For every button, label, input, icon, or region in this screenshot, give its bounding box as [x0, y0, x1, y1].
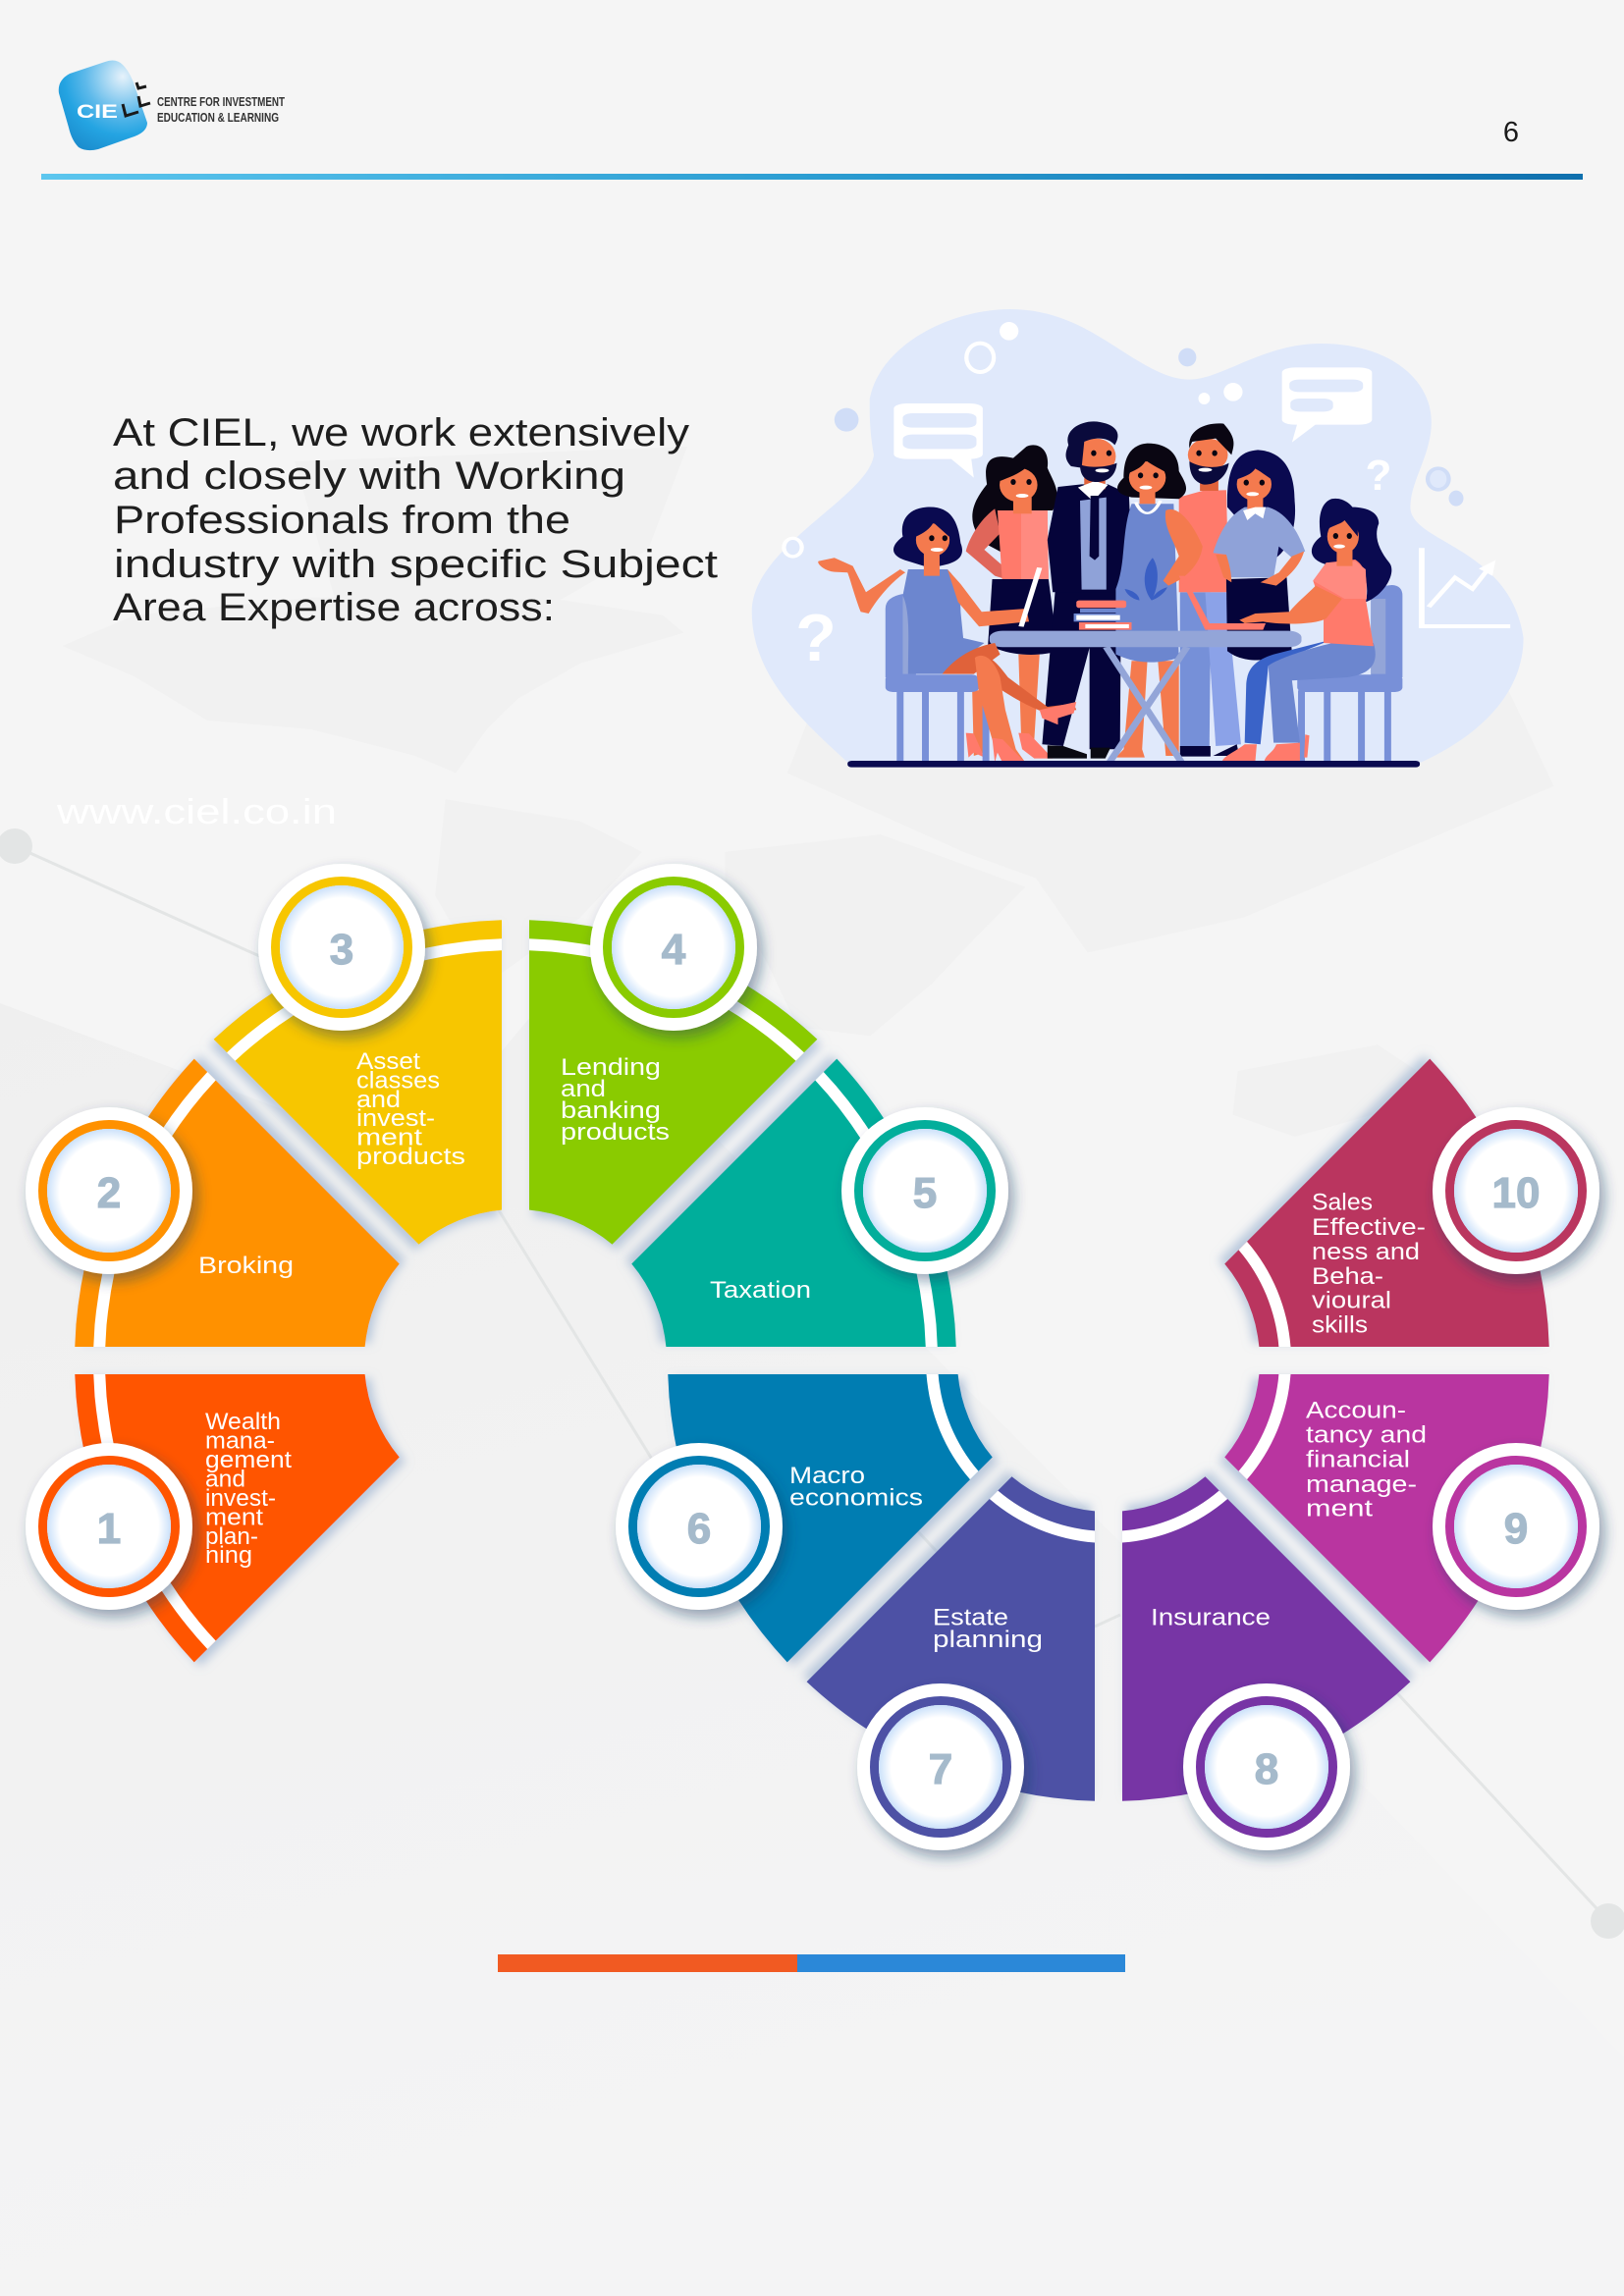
intro heading: and closely with Working: [113, 454, 625, 498]
books: [1074, 601, 1131, 630]
label: Insurance: [1151, 1604, 1271, 1631]
intro heading: At CIEL, we work extensively: [113, 411, 689, 454]
footer colour bar: [498, 1954, 1125, 1972]
label: [561, 1054, 670, 1146]
label: Effective-: [1312, 1214, 1426, 1241]
intro heading: Area Expertise across:: [113, 586, 555, 629]
badge 5: [841, 1107, 1008, 1274]
label: and: [356, 1087, 401, 1113]
label: Beha-: [1312, 1263, 1383, 1290]
table: [990, 631, 1302, 763]
segment 5: taxation: [631, 1059, 956, 1347]
badge 1: [26, 1443, 192, 1610]
label: Taxation: [710, 1277, 811, 1304]
badge 5: 5: [913, 1169, 937, 1217]
segment 7: estate planning: [807, 1476, 1095, 1801]
question mark right: ?: [1366, 452, 1391, 500]
label: Estate: [933, 1604, 1008, 1631]
label: ment: [356, 1125, 422, 1150]
label: and: [205, 1467, 245, 1492]
badge 9: 9: [1504, 1505, 1528, 1553]
label: products: [356, 1144, 465, 1170]
label: skills: [1312, 1311, 1368, 1339]
label: [205, 1409, 292, 1569]
label: and: [561, 1076, 606, 1102]
badge 2: [26, 1107, 192, 1274]
woman with long hair: [1214, 450, 1305, 661]
right chair: [1297, 585, 1402, 761]
segment 10: sales effectiveness: [1224, 1059, 1549, 1347]
logo: CIE: [77, 102, 118, 123]
label: [1306, 1398, 1427, 1522]
label: Wealth: [205, 1409, 281, 1435]
badge 4: 4: [662, 926, 686, 974]
segment 4: lending: [529, 920, 817, 1245]
segment 3: asset classes: [214, 920, 502, 1245]
seated woman left: [818, 507, 1076, 764]
intro heading: industry with specific Subject: [114, 543, 718, 586]
website watermark: www.ciel.co.in: [56, 791, 337, 831]
illustration: team around a table: [752, 309, 1524, 768]
woman in blue dress: [1115, 444, 1203, 758]
page number: 6: [1503, 117, 1519, 148]
badge 9: [1433, 1443, 1599, 1610]
floor line: [847, 761, 1420, 768]
label: plan-: [205, 1523, 258, 1550]
label: [356, 1048, 465, 1170]
question mark left: ?: [795, 601, 837, 675]
segment 6: macro economics: [668, 1374, 993, 1662]
label: Lending: [561, 1054, 661, 1081]
segment 9: accountancy: [1224, 1374, 1549, 1662]
segment 8: insurance: [1122, 1476, 1410, 1801]
label: ment: [1306, 1496, 1373, 1522]
label: gement: [205, 1447, 292, 1473]
man in pink shirt: [1179, 423, 1241, 757]
label: [789, 1463, 923, 1512]
badge 6: [616, 1443, 783, 1610]
logo: CENTRE FOR INVESTMENT: [157, 95, 285, 109]
badge 1: 1: [97, 1505, 121, 1553]
badge 7: [857, 1683, 1024, 1850]
label: Accoun-: [1306, 1398, 1406, 1423]
label: vioural: [1312, 1288, 1391, 1313]
badge 6: 6: [687, 1505, 711, 1553]
badge 10: [1433, 1107, 1599, 1274]
logo: EDUCATION & LEARNING: [157, 111, 279, 125]
label: ment: [205, 1504, 263, 1531]
intro heading: [113, 411, 718, 629]
badge 10: 10: [1492, 1169, 1540, 1217]
intro heading: Professionals from the: [114, 499, 570, 542]
badge 3: [258, 864, 425, 1031]
seated woman right: [1222, 499, 1391, 763]
label: financial: [1306, 1447, 1410, 1472]
plant: [1125, 558, 1167, 631]
man in suit: [1042, 421, 1131, 759]
label: [1312, 1190, 1426, 1339]
label: classes: [356, 1068, 440, 1094]
badge 4: [590, 864, 757, 1031]
blob backdrop: [752, 309, 1524, 763]
label: economics: [789, 1484, 923, 1512]
laptop: [1179, 576, 1266, 630]
floating decorations: [782, 322, 1464, 559]
segment 1: wealth management: [75, 1374, 400, 1662]
label: planning: [933, 1627, 1043, 1653]
logo: [59, 61, 285, 150]
label: tancy and: [1306, 1421, 1427, 1449]
segment 2: broking: [75, 1059, 400, 1347]
chart icon: [1419, 548, 1510, 628]
label: manage-: [1306, 1471, 1417, 1498]
label: banking: [561, 1097, 661, 1124]
label: mana-: [205, 1427, 275, 1455]
label: Macro: [789, 1463, 865, 1489]
label: Asset: [356, 1048, 420, 1075]
badge 3: 3: [330, 926, 353, 974]
header rule: [41, 174, 1583, 180]
label: Broking: [198, 1253, 294, 1279]
label: invest-: [356, 1105, 435, 1132]
label: [933, 1604, 1043, 1653]
label: ning: [205, 1542, 252, 1569]
label: ness and: [1312, 1239, 1420, 1265]
speech bubble right: [1282, 367, 1372, 443]
badge 2: 2: [97, 1169, 121, 1217]
label: invest-: [205, 1485, 276, 1512]
label: products: [561, 1119, 670, 1146]
badge 8: 8: [1255, 1745, 1278, 1793]
label: Sales: [1312, 1190, 1373, 1215]
woman standing left: [966, 445, 1057, 759]
badge 8: [1183, 1683, 1350, 1850]
speech bubble left: [893, 403, 983, 478]
badge 7: 7: [929, 1745, 952, 1793]
left chair: [886, 594, 986, 761]
